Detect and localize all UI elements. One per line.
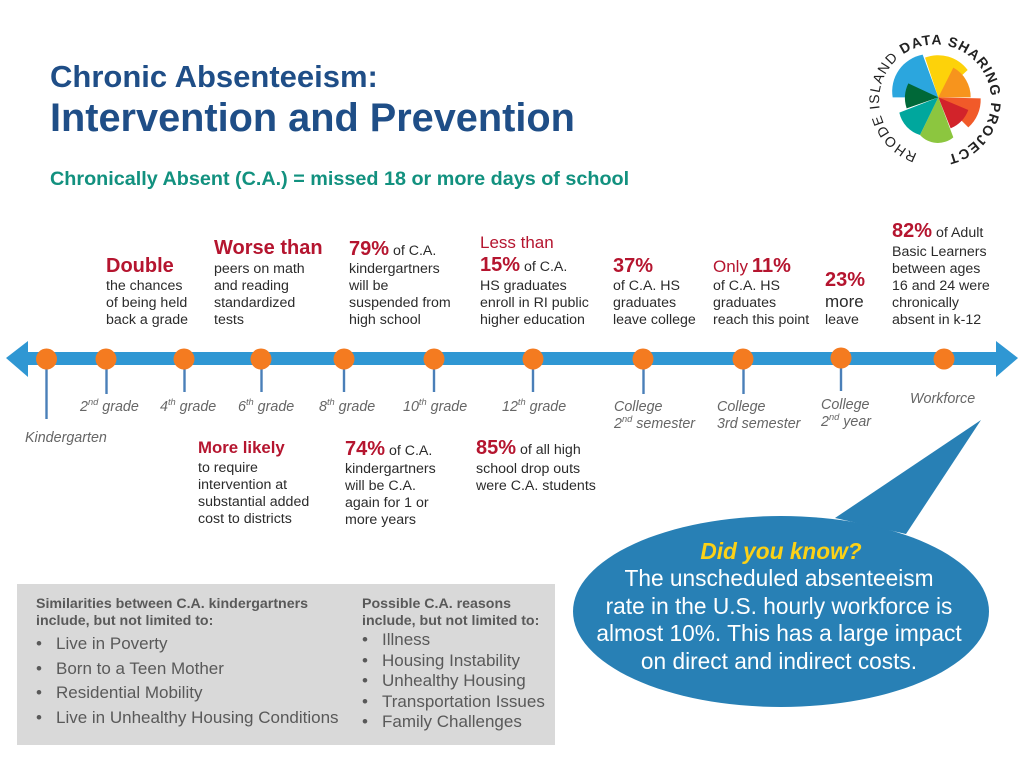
- fact: 79%: will be: [349, 278, 388, 294]
- fact: 74%: [345, 438, 436, 528]
- reasons list: [362, 596, 545, 731]
- fact: double: Double: [106, 255, 174, 277]
- fact: 82%: absent in k-12: [892, 312, 981, 328]
- fact: 85%: were C.A. students: [476, 478, 596, 494]
- title: Intervention and Prevention: [50, 96, 575, 140]
- title: Chronic Absenteeism:: [50, 59, 378, 94]
- timeline labels: 6th grade: [238, 397, 294, 415]
- timeline labels: [25, 391, 975, 446]
- reasons list: Unhealthy Housing: [382, 671, 526, 690]
- panel: similarities and reasons: [17, 584, 555, 745]
- fact: only 11%: graduates: [713, 295, 776, 311]
- fact: more likely: substantial added: [198, 494, 309, 510]
- fact: more likely: cost to districts: [198, 511, 292, 527]
- fact: less than 15%: HS graduates: [480, 278, 567, 294]
- timeline labels: Kindergarten: [25, 430, 107, 446]
- fact: only 11%: of C.A. HS: [713, 278, 780, 294]
- fact: 79%: 79% of C.A.: [349, 238, 436, 260]
- reasons list: Possible C.A. reasons: [362, 596, 511, 612]
- fact: only 11%: [713, 255, 810, 328]
- fact: double: [106, 255, 188, 328]
- callout: did you know: on direct and indirect costs.: [641, 648, 917, 674]
- fact: 85%: school drop outs: [476, 461, 580, 477]
- timeline labels: 10th grade: [403, 397, 467, 415]
- fact: worse than: [214, 237, 323, 328]
- similarities list: include, but not limited to:: [36, 613, 213, 629]
- timeline labels: 2nd grade: [80, 397, 139, 415]
- fact: worse than: tests: [214, 312, 244, 328]
- logo: Rhode Island Data Sharing Project: RHODE ISLAND DATA SHARING PROJECT: [869, 34, 1001, 164]
- fact: more likely: [198, 438, 309, 527]
- fact: 82%: 16 and 24 were: [892, 278, 990, 294]
- timeline labels: 3rd semester: [717, 416, 800, 432]
- fact: 79%: suspended from: [349, 295, 451, 311]
- fact: 37%: graduates: [613, 295, 676, 311]
- fact: 74%: 74% of C.A.: [345, 438, 432, 460]
- fact: 85%: 85% of all high: [476, 437, 581, 459]
- timeline labels: 8th grade: [319, 397, 375, 415]
- callout: did you know: rate in the U.S. hourly workforce is: [606, 593, 952, 619]
- timeline labels: College: [717, 399, 765, 415]
- fact: 82%: between ages: [892, 261, 980, 277]
- subtitle: definition: Chronically Absent (C.A.) = missed 18 or more days of school: [50, 168, 629, 190]
- fact: 37%: of C.A. HS: [613, 278, 680, 294]
- timeline labels: 2nd year: [821, 412, 871, 430]
- fact: 79%: kindergartners: [349, 261, 440, 277]
- fact: double: of being held: [106, 295, 187, 311]
- fact: 23%: leave: [825, 312, 859, 328]
- similarities list: Similarities between C.A. kindergartners: [36, 596, 308, 612]
- callout: did you know: The unscheduled absenteeism: [624, 565, 934, 591]
- fact: more likely: More likely: [198, 438, 285, 457]
- fact: 74%: kindergartners: [345, 460, 436, 476]
- fact: only 11%: reach this point: [713, 312, 809, 328]
- reasons list: include, but not limited to:: [362, 613, 539, 629]
- callout: did you know: [573, 420, 989, 707]
- fact: double: the chances: [106, 278, 183, 294]
- fact: less than 15%: enroll in RI public: [480, 295, 589, 311]
- fact: 23%: more: [825, 292, 864, 311]
- fact: 23%: 23%: [825, 269, 865, 291]
- fact: more likely: intervention at: [198, 477, 287, 493]
- fact: 37%: leave college: [613, 312, 696, 328]
- similarities list: Live in Poverty: [56, 634, 168, 653]
- timeline labels: Workforce: [910, 391, 975, 407]
- similarities list: Born to a Teen Mother: [56, 659, 224, 678]
- fact: worse than: Worse than: [214, 237, 323, 259]
- similarities list: Live in Unhealthy Housing Conditions: [56, 708, 339, 727]
- fact: 82%: [892, 220, 990, 328]
- callout: did you know: almost 10%. This has a large impact: [596, 620, 962, 646]
- fact: worse than: and reading: [214, 278, 289, 294]
- similarities list: [36, 596, 339, 727]
- fact: worse than: standardized: [214, 295, 295, 311]
- fact: 74%: again for 1 or: [345, 494, 429, 510]
- fact: double: back a grade: [106, 312, 188, 328]
- fact: only 11%: Only 11%: [713, 255, 791, 277]
- timeline labels: 12th grade: [502, 397, 566, 415]
- fact: 82%: chronically: [892, 295, 959, 311]
- fact: 82%: 82% of Adult: [892, 220, 983, 242]
- fact: 74%: more years: [345, 512, 416, 528]
- timeline labels: 4th grade: [160, 397, 216, 415]
- fact: 79%: [349, 238, 451, 328]
- similarities list: Residential Mobility: [56, 683, 202, 702]
- fact: 74%: will be C.A.: [345, 478, 416, 494]
- fact: 82%: Basic Learners: [892, 244, 987, 260]
- fact: worse than: peers on math: [214, 261, 305, 277]
- fact: less than 15%: higher education: [480, 312, 585, 328]
- fact: less than 15%: [480, 233, 589, 328]
- fact: 37%: 37%: [613, 255, 653, 277]
- timeline labels: College: [614, 399, 662, 415]
- fact: more likely: to require: [198, 460, 258, 476]
- callout: did you know: Did you know?: [700, 538, 862, 564]
- timeline labels: College: [821, 397, 869, 413]
- fact: 37%: [613, 255, 696, 328]
- fact: less than 15%: 15% of C.A.: [480, 254, 567, 276]
- fact: 85%: [476, 437, 596, 494]
- fact: 79%: high school: [349, 312, 421, 328]
- title: [50, 59, 575, 140]
- fact: 23%: [825, 269, 865, 328]
- reasons list: Housing Instability: [382, 650, 520, 670]
- reasons list: Illness: [382, 630, 430, 649]
- fact: less than 15%: Less than: [480, 233, 554, 252]
- reasons list: Family Challenges: [382, 712, 522, 731]
- timeline labels: 2nd semester: [614, 414, 695, 432]
- reasons list: Transportation Issues: [382, 692, 545, 710]
